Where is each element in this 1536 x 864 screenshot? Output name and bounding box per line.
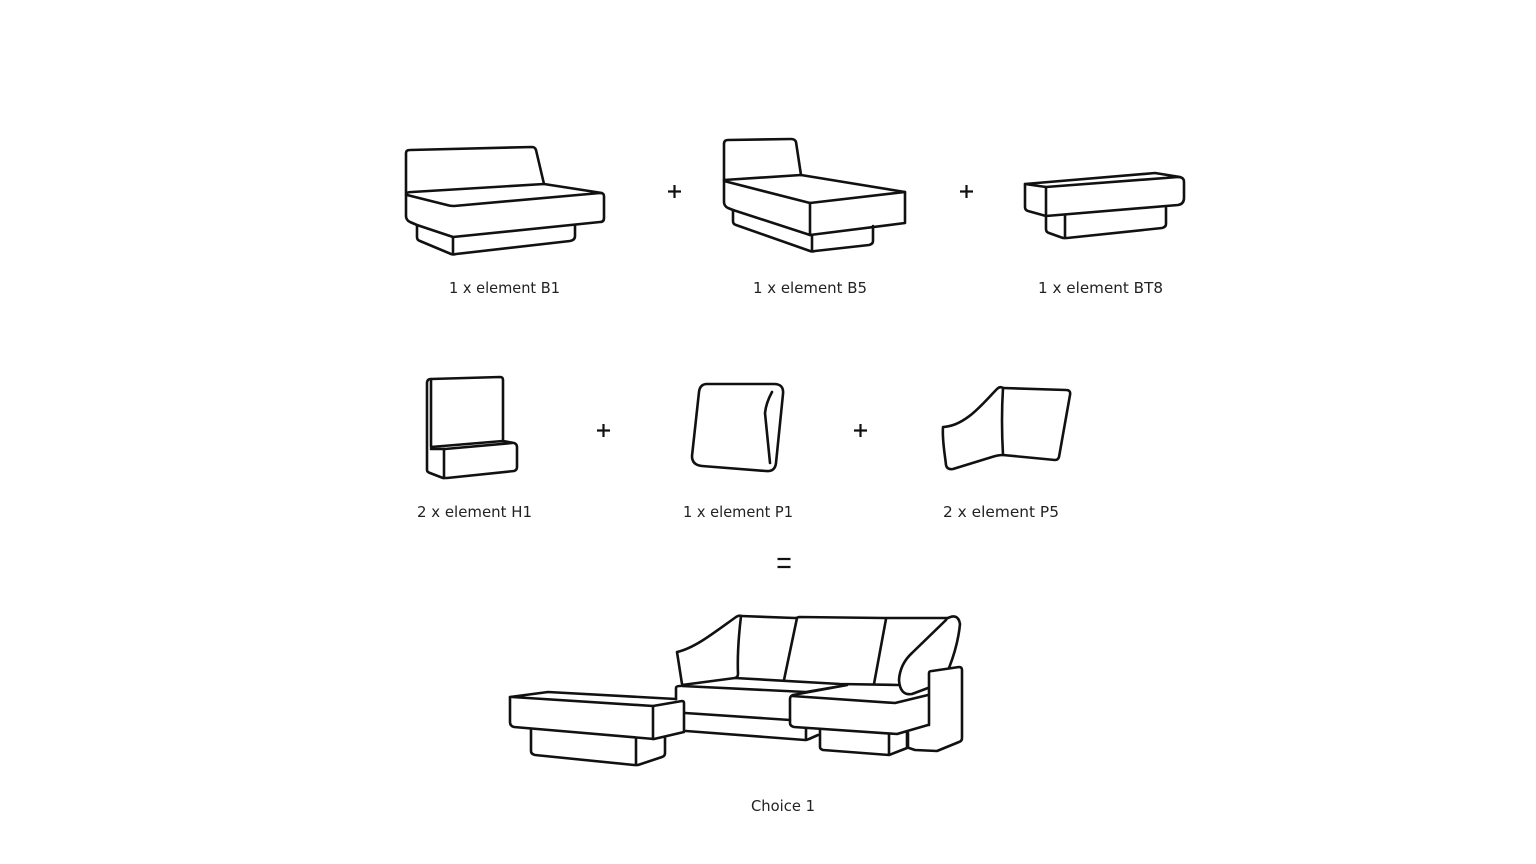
label: element B5: 1 x element B5 xyxy=(753,279,867,297)
plus sign 3 xyxy=(597,424,610,437)
icon: element H1 xyxy=(427,377,517,478)
icon: element P5 xyxy=(943,387,1070,469)
icon: element B5 xyxy=(724,139,905,252)
plus sign 4 xyxy=(854,424,867,437)
back cushions xyxy=(741,616,947,618)
seat lines xyxy=(735,678,899,685)
icon: element P1 xyxy=(692,384,783,471)
label: element P1: 1 x element P1 xyxy=(683,503,793,521)
label: element P5: 2 x element P5 xyxy=(943,503,1059,521)
label: choice 1: Choice 1 xyxy=(751,797,815,815)
side panel xyxy=(908,667,962,751)
label: element B1: 1 x element B1 xyxy=(449,279,560,297)
label: element BT8: 1 x element BT8 xyxy=(1038,279,1163,297)
table xyxy=(510,692,676,699)
equals sign xyxy=(778,559,790,567)
icon: element B1 xyxy=(406,147,604,254)
left arm cushion xyxy=(677,616,741,685)
chaise xyxy=(790,685,928,734)
icon: element BT8 xyxy=(1025,173,1184,238)
right arm cushion xyxy=(946,616,960,668)
icon: assembled sofa and table xyxy=(510,616,962,765)
label: element H1: 2 x element H1 xyxy=(417,503,532,521)
plus sign 2 xyxy=(960,185,973,198)
plus sign 1 xyxy=(668,185,681,198)
